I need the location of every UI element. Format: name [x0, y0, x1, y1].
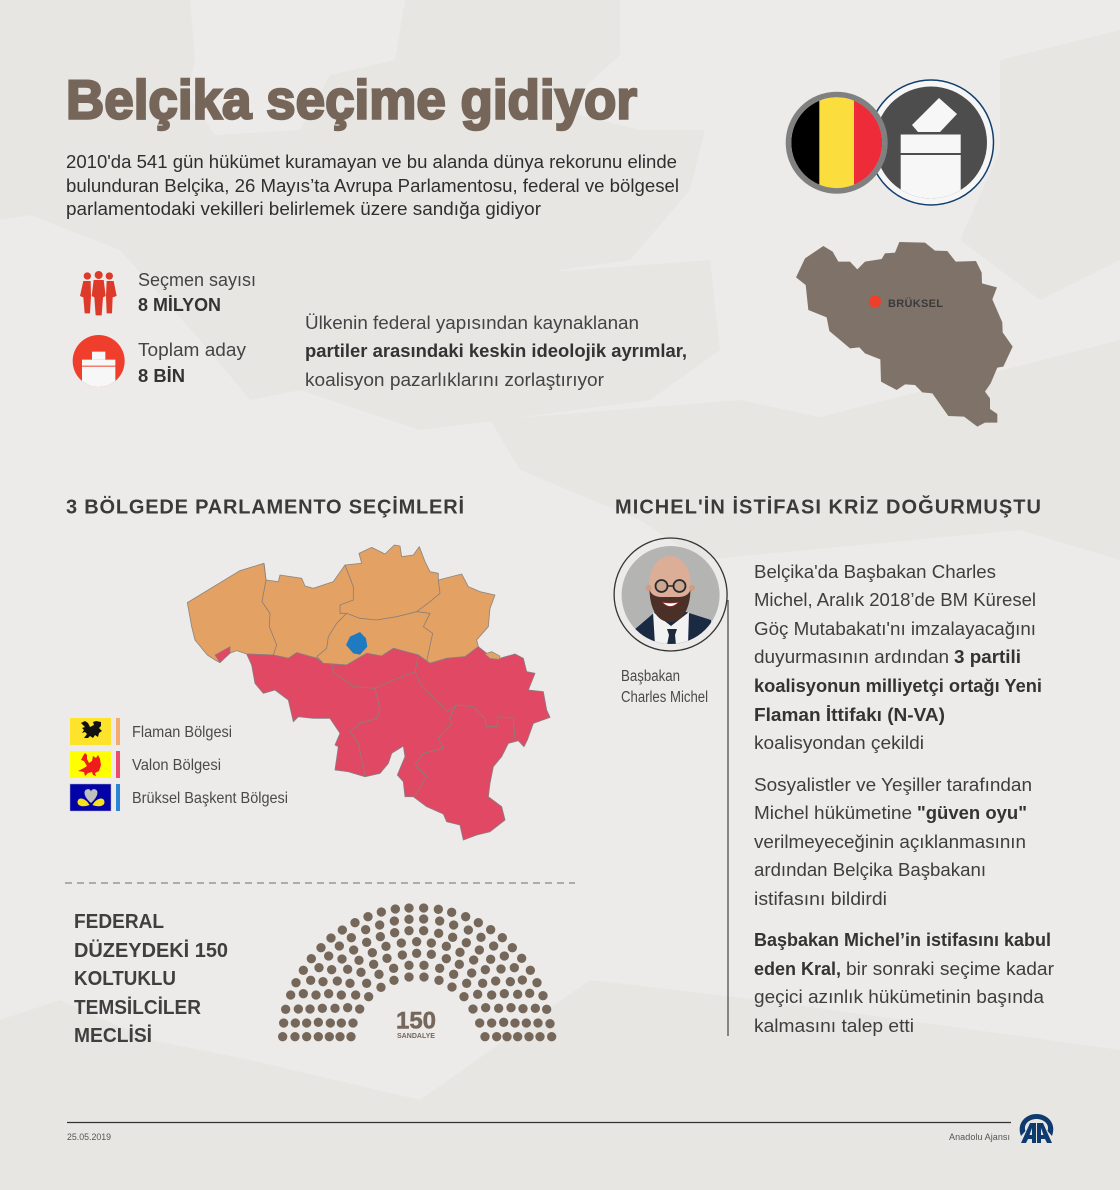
legend: Brussels: Brüksel Başkent Bölgesi: [132, 790, 288, 807]
heading: Michel resignation: MICHEL'İN İSTİFASI KRİZ DOĞURMUŞTU: [615, 494, 1041, 518]
icon: Anadolu Agency logo: [1020, 1114, 1053, 1143]
paragraph 2: istifasını bildirdi: [754, 889, 887, 909]
paragraph 1: Belçika'da Başbakan Charles: [754, 562, 996, 582]
ideological divide statement: Ülkenin federal yapısından kaynaklanan: [305, 313, 639, 333]
paragraph 1: 3 partili: [954, 647, 1021, 667]
ideological divide statement: koalisyon pazarlıklarını zorlaştırıyor: [305, 370, 604, 390]
ideological divide statement: partiler arasındaki keskin ideolojik ayrımlar,: [305, 341, 687, 361]
paragraph 2: "güven oyu": [917, 803, 1027, 823]
paragraph 1: duyurmasının ardından: [754, 647, 949, 667]
icon: red ballot box: [73, 335, 125, 388]
footer: [67, 1114, 1053, 1143]
paragraph 3: [754, 930, 1054, 1036]
legend: Walloon: Valon Bölgesi: [132, 757, 221, 774]
ideological divide statement: [305, 313, 687, 390]
paragraph 3: bir sonraki seçime kadar: [846, 959, 1054, 979]
article text block: [754, 562, 1054, 1036]
stat: candidates: 8 BİN: [138, 366, 185, 386]
portrait caption: [621, 668, 708, 706]
paragraph 2: ardından Belçika Başbakanı: [754, 860, 986, 880]
Belgium locator map: BRÜKSEL: [888, 297, 943, 310]
intro paragraph: 2010'da 541 gün hükümet kuramayan ve bu alanda dünya rekorunu elinde: [66, 152, 677, 172]
paragraph 1: Göç Mutabakatı'nı imzalayacağını: [754, 619, 1036, 639]
paragraph 3: Başbakan Michel’in istifasını kabul: [754, 930, 1051, 950]
Belgium locator map: [796, 242, 1013, 427]
federal chamber label: TEMSİLCİLER: [74, 996, 202, 1019]
legend: Brussels: [70, 784, 288, 811]
seat total: SANDALYE: [397, 1031, 435, 1040]
paragraph 3: geçici azınlık hükümetinin başında: [754, 987, 1045, 1007]
stat: candidates: [73, 335, 246, 388]
icon: Belgian flag: [788, 94, 885, 191]
region: Brussels: [346, 632, 367, 655]
icon: people: [80, 271, 117, 315]
federal chamber label: FEDERAL: [74, 911, 164, 933]
seat total: 150: [396, 1008, 436, 1034]
legend: Walloon: [70, 751, 221, 778]
federal chamber label: KOLTUKLU: [74, 968, 176, 990]
paragraph 3: eden Kral,: [754, 959, 841, 979]
agency credit: Anadolu Ajansı: [949, 1132, 1010, 1142]
federal chamber label: DÜZEYDEKİ 150: [74, 939, 228, 962]
intro paragraph: parlamentodaki vekilleri belirlemek üzere sandığa gidiyor: [66, 199, 541, 219]
region: Flanders: [187, 545, 495, 665]
portrait caption: Charles Michel: [621, 689, 708, 706]
legend: Flemish: Flaman Bölgesi: [132, 724, 232, 741]
legend: Flemish: [70, 718, 232, 745]
paragraph 2: [754, 775, 1032, 909]
intro paragraph: [66, 152, 679, 219]
paragraph 1: koalisyondan çekildi: [754, 733, 924, 753]
paragraph 2: Michel hükümetine: [754, 803, 912, 823]
date: 25.05.2019: [67, 1132, 111, 1142]
portrait of Charles Michel: [614, 538, 727, 651]
icon: ballot box: [868, 80, 994, 205]
stat: candidates: Toplam aday: [138, 340, 246, 360]
paragraph 2: Sosyalistler ve Yeşiller tarafından: [754, 775, 1032, 795]
stat: voters: [80, 270, 256, 315]
paragraph 2: verilmeyeceğinin açıklanmasının: [754, 832, 1026, 852]
paragraph 1: Michel, Aralık 2018’de BM Küresel: [754, 590, 1036, 610]
heading: regional elections: 3 BÖLGEDE PARLAMENTO SEÇİMLERİ: [66, 496, 464, 518]
paragraph 3: kalmasını talep etti: [754, 1016, 914, 1036]
region: Wallonia: [247, 647, 550, 840]
federal chamber label: [74, 911, 228, 1047]
paragraph 1: koalisyonun milliyetçi ortağı Yeni: [754, 676, 1042, 696]
portrait caption: Başbakan: [621, 668, 680, 685]
stat: voters: 8 MİLYON: [138, 295, 221, 315]
stat: voters: Seçmen sayısı: [138, 270, 256, 290]
paragraph 1: Flaman İttifakı (N-VA): [754, 705, 945, 725]
paragraph 1: [754, 562, 1042, 753]
regional map of Belgium: [187, 545, 550, 840]
federal chamber label: MECLİSİ: [74, 1024, 152, 1047]
intro paragraph: bulunduran Belçika, 26 Mayıs’ta Avrupa Parlamentosu, federal ve bölgesel: [66, 176, 679, 196]
legend: [70, 718, 288, 811]
parliament seats chart: [278, 903, 556, 1041]
title: Belçika seçime gidiyor: [66, 68, 637, 130]
